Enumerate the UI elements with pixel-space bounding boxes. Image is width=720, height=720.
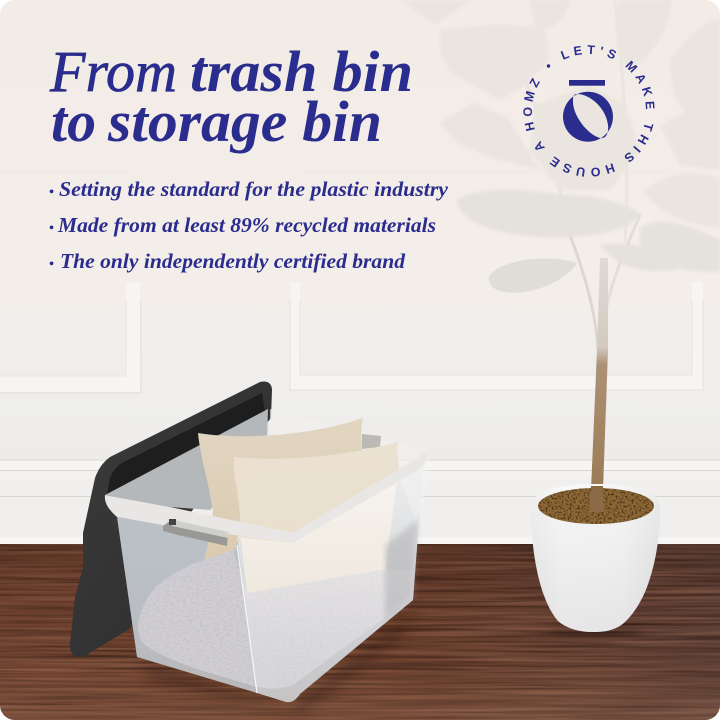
white blanket (138, 550, 413, 689)
blanket shadow (385, 520, 418, 620)
bullet 2: • (49, 221, 54, 236)
lid inner recess (106, 393, 266, 500)
title: trash bin (190, 39, 413, 104)
black lid (70, 381, 272, 657)
baseboard (0, 460, 720, 545)
bin handle far side (362, 434, 381, 449)
title: From (49, 39, 177, 104)
storage bin with lid (70, 381, 430, 716)
plant darker leaf (489, 258, 577, 293)
logo bar (569, 80, 605, 86)
logo badge (523, 45, 654, 177)
blanket knit texture (138, 551, 342, 684)
bullet 3: • (49, 257, 54, 272)
back pillow (198, 418, 363, 563)
bullet 2: Made from at least 89% recycled materials (57, 213, 436, 237)
bin front frosted panel (237, 467, 423, 702)
logo ring (563, 92, 613, 142)
bin rear upper right (270, 409, 414, 460)
title: to (51, 89, 96, 154)
corner seam (237, 545, 257, 693)
front pillow (234, 442, 399, 594)
wall (0, 0, 720, 460)
tree trunk (591, 258, 608, 484)
trunk base (589, 486, 604, 512)
pot body (531, 484, 660, 632)
bullet 1: Setting the standard for the plastic industry (59, 177, 449, 201)
bin rim (105, 450, 430, 543)
bin shell (117, 467, 423, 702)
wood floor (0, 544, 720, 720)
bullet list (49, 177, 449, 273)
grey handle (163, 519, 228, 546)
plant stems (525, 0, 640, 350)
plant lower leaves (457, 190, 720, 272)
bin right translucent side (420, 460, 428, 497)
plant pot (531, 484, 660, 637)
faded plant (400, 0, 720, 350)
title: storage bin (107, 89, 382, 154)
slogan dot (547, 64, 550, 68)
bullet 3: The only independently certified brand (60, 249, 405, 273)
bullet 1: • (49, 185, 54, 200)
circular slogan: LET'S MAKE THIS HOUSE A HOMZ (523, 45, 654, 177)
plant leaves (400, 0, 720, 228)
potting soil (538, 488, 654, 524)
wall moulding panels (0, 300, 704, 394)
bin interior back wall (105, 409, 268, 510)
